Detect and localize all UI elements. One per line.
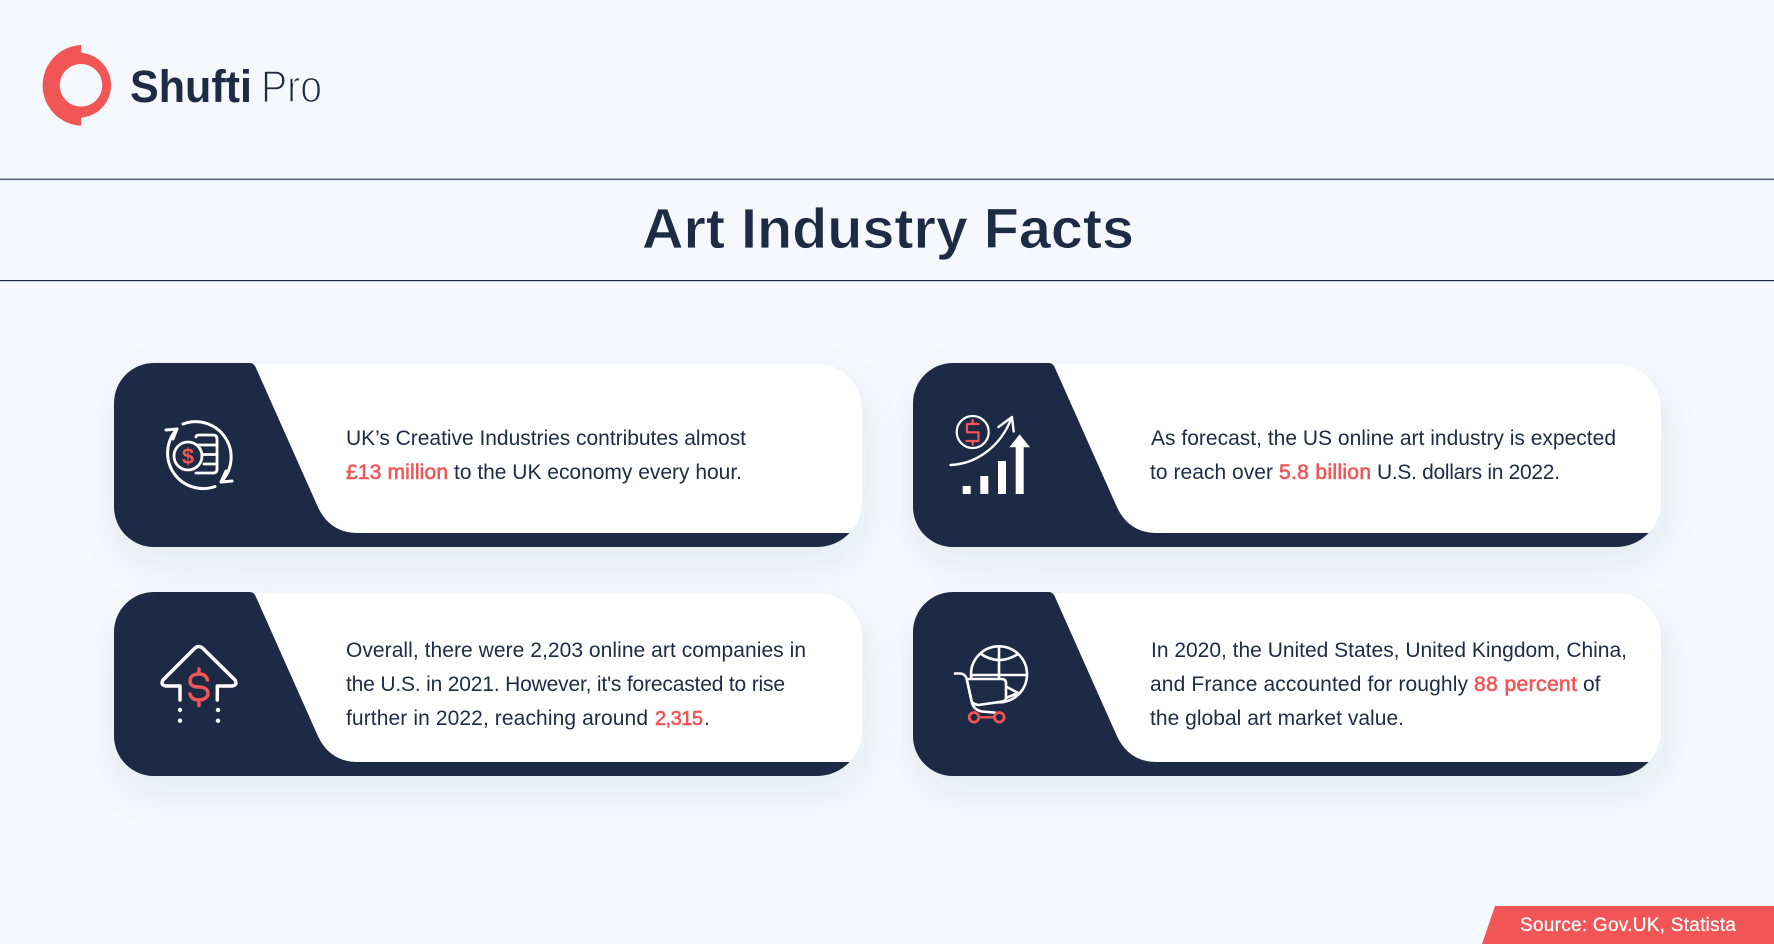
text block bbox=[346, 427, 746, 484]
card background bbox=[913, 592, 1661, 776]
text block: UK’s Creative Industries contributes almost bbox=[346, 427, 746, 450]
text block: to the UK economy every hour. bbox=[454, 461, 742, 484]
card background bbox=[114, 592, 862, 776]
title: Art Industry Facts bbox=[642, 197, 1134, 261]
text block: further in 2022, reaching around bbox=[346, 707, 648, 730]
text block bbox=[1150, 427, 1616, 484]
text block: . bbox=[704, 707, 710, 730]
logo mark: red ring bbox=[43, 45, 111, 126]
logo wordmark: Pro bbox=[261, 61, 322, 112]
text block: 2,315 bbox=[655, 708, 703, 730]
card background bbox=[913, 363, 1661, 547]
text block: As forecast, the US online art industry is expected bbox=[1151, 427, 1616, 450]
text block: to reach over bbox=[1150, 461, 1273, 484]
text block bbox=[346, 639, 806, 730]
text block: the global art market value. bbox=[1150, 707, 1404, 730]
text block: and France accounted for roughly bbox=[1150, 673, 1468, 696]
tag background bbox=[1482, 906, 1774, 944]
icon: house arrow with dollar bbox=[162, 646, 236, 723]
icon: coins with circular arrows: $ bbox=[182, 444, 194, 469]
text block: 88 percent bbox=[1474, 673, 1577, 696]
panel: UK creative industries bbox=[114, 363, 862, 547]
icon: dollar coin and rising bars bbox=[950, 416, 1030, 494]
source text: Source: Gov.UK, Statista bbox=[1520, 915, 1736, 936]
text block: 5.8 billion bbox=[1279, 461, 1371, 484]
card background bbox=[114, 363, 862, 547]
logo wordmark bbox=[130, 61, 322, 112]
panel: global art market share bbox=[913, 592, 1661, 776]
panel: US online art forecast bbox=[913, 363, 1661, 547]
icon: globe in shopping cart bbox=[955, 646, 1027, 722]
text block: £13 million bbox=[346, 461, 448, 484]
panel: online art companies bbox=[114, 592, 862, 776]
text block bbox=[1150, 639, 1627, 730]
text block: the U.S. in 2021. However, it's forecasted to rise bbox=[346, 673, 785, 696]
icon: coins with circular arrows bbox=[166, 422, 232, 489]
source tag bbox=[1482, 906, 1774, 944]
text block: U.S. dollars in 2022. bbox=[1377, 461, 1560, 484]
text block: In 2020, the United States, United Kingdom, China, bbox=[1151, 639, 1627, 662]
logo wordmark: Shufti bbox=[130, 61, 252, 112]
logo: Shufti Pro bbox=[43, 45, 322, 126]
text block: of bbox=[1583, 673, 1601, 696]
text block: Overall, there were 2,203 online art companies in bbox=[346, 639, 806, 662]
